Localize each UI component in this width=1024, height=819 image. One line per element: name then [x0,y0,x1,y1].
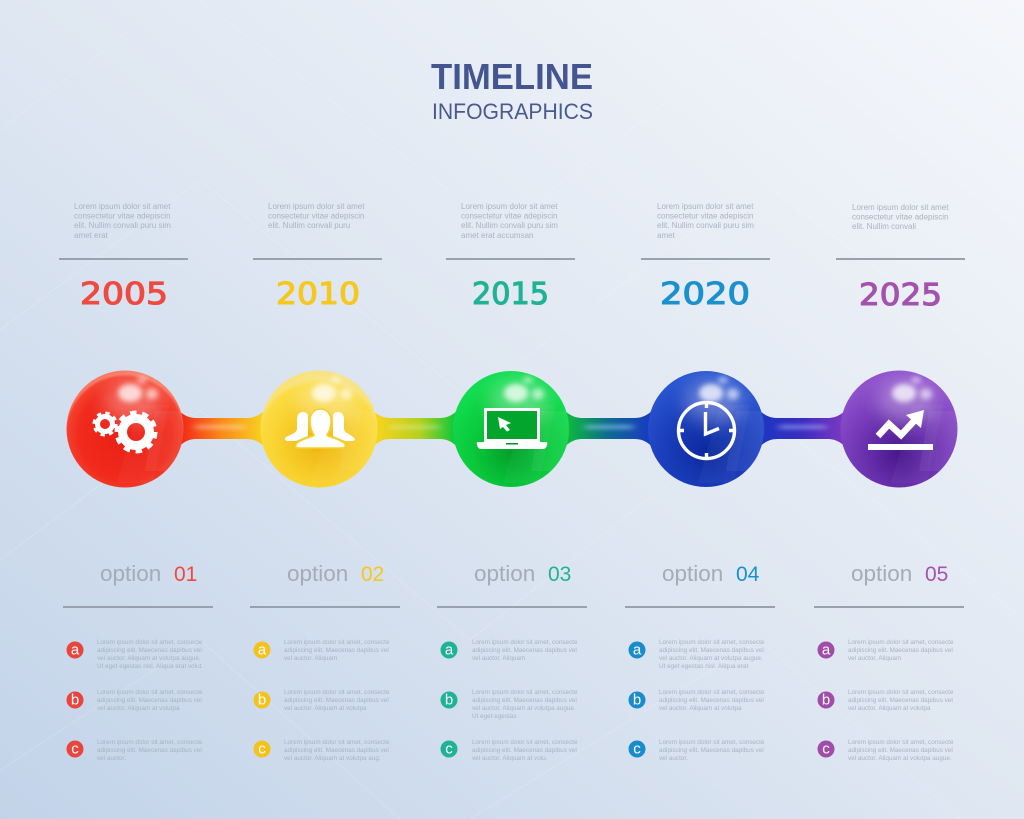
option 05 label: 05 [925,563,948,586]
panel: 2010 header [253,202,382,312]
item c: adipiscing elit. Maecenas dapibus vel [848,747,953,754]
item c: vel auctor. Aliquam at volutpa augue. [848,755,952,762]
item c [818,739,954,762]
item a [254,639,390,662]
year 2015: 2015 [472,277,549,312]
item b [254,689,390,712]
item a: a [445,642,454,658]
item b: vel auctor. Aliquam at volutpa [284,705,367,712]
item a [66,639,203,670]
option 01 label: option [100,561,161,586]
item a: Lorem ipsum dolor sit amet, consecte [848,639,954,646]
item a: vel auctor. Aliquam [284,655,337,662]
option 05 label: option [851,561,912,586]
item c: c [445,740,453,758]
item c [254,739,390,762]
title [431,56,593,124]
item a: Lorem ipsum dolor sit amet, consecte [97,639,203,646]
item c: adipiscing elit. Maecenas dapibus vel [97,747,202,754]
connector: blue to purple [753,404,852,454]
intro text 2005: Lorem ipsum dolor sit amet [74,202,171,211]
item c: vel auctor. Aliquam at volutpa aug. [284,755,381,762]
panel: option 01 [63,561,213,762]
item c: vel auctor. Aliquam at volu. [472,755,548,762]
item a: a [258,642,267,658]
panel: 2025 header [836,203,965,313]
panel: option 05 [814,561,964,762]
subheading: INFOGRAPHICS: INFOGRAPHICS [432,99,593,124]
item b [628,689,765,712]
item b: adipiscing elit. Maecenas dapibus vel [284,697,389,704]
option 01 label: 01 [174,563,197,586]
intro text 2015: elit. Nullim convali puru sim [461,221,558,230]
panel: option 03 [437,561,587,762]
year 2020: 2020 [660,277,750,312]
sphere: green with laptop [453,371,573,487]
item b: adipiscing elit. Maecenas dapibus vel [97,697,202,704]
icon: clock [678,402,735,459]
item c: adipiscing elit. Maecenas dapibus vel [284,747,389,754]
item b: b [822,692,830,708]
item b: b [258,692,266,708]
intro text 2025: elit. Nullim convali [852,222,916,231]
year 2010: 2010 [276,277,360,312]
item b: vel auctor. Aliquam at volutpa augue. [472,705,576,712]
option 02 label: option [287,561,348,586]
intro text 2015: Lorem ipsum dolor sit amet [461,202,558,211]
item a [440,639,578,662]
intro text 2020: amet [657,231,676,240]
item c: c [258,740,266,758]
item a: a [71,642,80,658]
icon: rising chart [868,410,933,450]
connector: green to blue [558,404,659,454]
item b: Lorem ipsum dolor sit amet, consecte [472,689,578,696]
item b [818,689,954,712]
panel: option 04 [625,561,775,762]
item c: Lorem ipsum dolor sit amet, consecte [284,739,390,746]
item b: b [445,692,453,708]
intro text 2010: Lorem ipsum dolor sit amet [268,202,365,211]
item b: b [71,692,79,708]
item a: vel auctor. Aliquam at volutpa augue. [659,655,763,662]
item a: adipiscing elit. Maecenas dapibus vel [848,647,953,654]
item a: Ut eget egestas nisl. Aliqua erat [659,663,748,670]
sphere: blue with clock [648,371,768,487]
sphere: yellow with people [260,370,381,488]
item b: adipiscing elit. Maecenas dapibus vel [659,697,764,704]
item c [440,739,578,762]
option 03 label: 03 [548,563,571,586]
item b: vel auctor. Aliquam at volutpa [97,705,180,712]
intro text 2005: amet erat [74,231,109,240]
item a: vel auctor. Aliquam [848,655,901,662]
item c: Lorem ipsum dolor sit amet, consecte [97,739,203,746]
connector: red to yellow [172,404,272,454]
item b: vel auctor. Aliquam at volutpa [848,705,931,712]
panel: 2020 header [641,202,770,312]
item a: Lorem ipsum dolor sit amet, consecte [659,639,765,646]
item a: adipiscing elit. Maecenas dapibus vel [472,647,577,654]
intro text 2010: elit. Nullim convali puru [268,221,350,230]
icon: gears [94,412,156,452]
panel: option 02 [250,561,400,762]
icon: laptop [477,410,547,449]
item c: adipiscing elit. Maecenas dapibus vel [472,747,577,754]
item a: a [822,642,831,658]
item c: c [822,740,830,758]
item b: Lorem ipsum dolor sit amet, consecte [284,689,390,696]
item a: Ut eget egestas nisl. Aliqua erat volut. [97,663,203,670]
item b [66,689,203,712]
timeline track [66,370,961,488]
heading: TIMELINE: TIMELINE [431,56,593,97]
item a: adipiscing elit. Maecenas dapibus vel [659,647,764,654]
option 04 label: option [662,561,723,586]
intro text 2005: elit. Nullim convali puru sim [74,221,171,230]
item a: adipiscing elit. Maecenas dapibus vel [97,647,202,654]
intro text 2020: elit. Nullim convali puru sim [657,221,754,230]
intro text 2010: consectetur vitae adepiscin [268,212,364,221]
year 2025: 2025 [859,278,942,313]
item a: adipiscing elit. Maecenas dapibus vel [284,647,389,654]
item c: c [633,740,641,758]
year 2005: 2005 [80,277,168,312]
item c: Lorem ipsum dolor sit amet, consecte [472,739,578,746]
panel: 2015 header [446,202,575,312]
sphere: red with gears [66,370,187,488]
item b: vel auctor. Aliquam at volutpa [659,705,742,712]
item b: Lorem ipsum dolor sit amet, consecte [659,689,765,696]
item b: adipiscing elit. Maecenas dapibus vel [848,697,953,704]
intro text 2025: consectetur vitae adepiscin [852,213,948,222]
option 02 label: 02 [361,563,384,586]
intro text 2020: Lorem ipsum dolor sit amet [657,202,754,211]
option 04 label: 04 [736,563,760,586]
item a: a [633,642,642,658]
item b: adipiscing elit. Maecenas dapibus vel [472,697,577,704]
item c: Lorem ipsum dolor sit amet, consecte [659,739,765,746]
item c: adipiscing elit. Maecenas dapibus vel [659,747,764,754]
intro text 2005: consectetur vitae adepiscin [74,212,170,221]
item a [818,639,954,662]
intro text 2025: Lorem ipsum dolor sit amet [852,203,949,212]
item a: vel auctor. Aliquam at volutpa augue. [97,655,201,662]
intro text 2020: consectetur vitae adepiscin [657,212,754,221]
connector: yellow to green [366,404,464,454]
item b: Lorem ipsum dolor sit amet, consecte [97,689,203,696]
option 03 label: option [474,561,535,586]
item c: vel auctor. [97,755,126,762]
sphere: purple with chart [840,370,961,488]
item c [66,739,203,762]
item b: Ut eget egestas [472,713,516,720]
icon: people [285,409,355,448]
item a: Lorem ipsum dolor sit amet, consecte [284,639,390,646]
item c: c [71,740,79,758]
intro text 2015: consectetur vitae adepiscin [461,212,558,221]
item a: Lorem ipsum dolor sit amet, consecte [472,639,578,646]
item c [628,739,765,762]
item b: b [633,692,641,708]
item a: vel auctor. Aliquam [472,655,525,662]
item b [440,689,578,720]
item c: Lorem ipsum dolor sit amet, consecte [848,739,954,746]
intro text 2015: amet erat accumsan [461,231,533,240]
item a [628,639,765,670]
item c: vel auctor. [659,755,688,762]
item b: Lorem ipsum dolor sit amet, consecte [848,689,954,696]
panel: 2005 header [59,202,188,312]
